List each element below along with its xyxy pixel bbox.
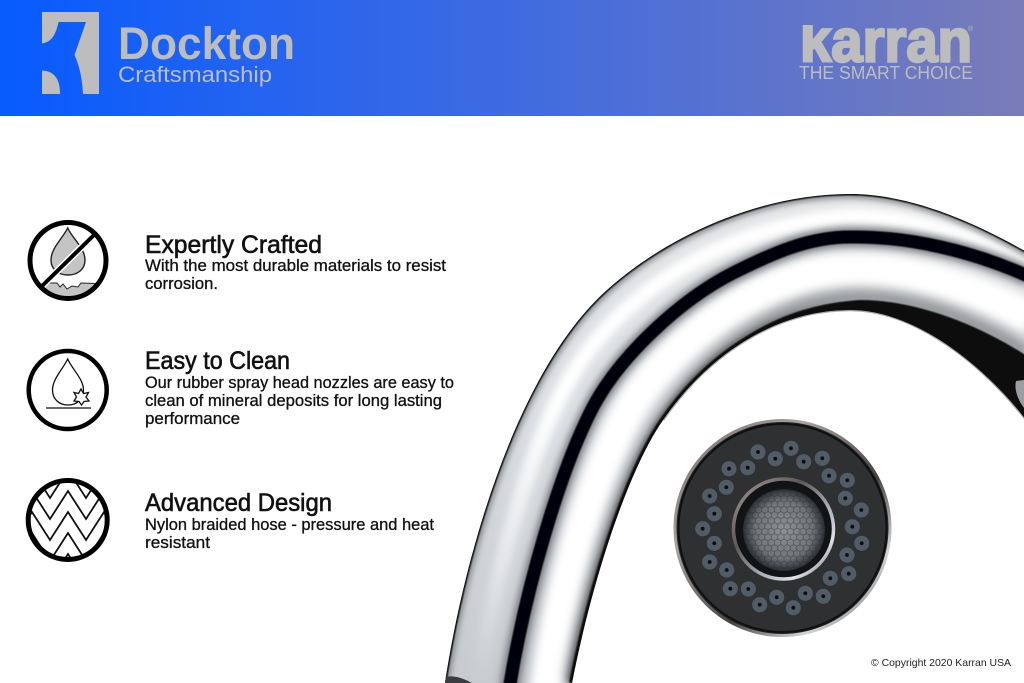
icon: braided hose <box>26 478 110 562</box>
heading and text: Easy to Clean: performance <box>145 410 240 428</box>
heading and text: Expertly Crafted <box>145 231 446 293</box>
heading and text: Expertly Crafted: With the most durable materials to resist <box>145 257 446 275</box>
heading and text: Easy to Clean <box>145 347 454 428</box>
heading and text: Expertly Crafted: Expertly Crafted <box>145 231 322 259</box>
heading and text: Easy to Clean: Our rubber spray head nozzles are easy to <box>145 374 454 392</box>
title: Dockton Craftsmanship: Dockton <box>118 18 295 69</box>
aerator ring <box>734 479 834 579</box>
spray head rim <box>675 420 890 636</box>
icon: easy clean drop <box>29 351 107 429</box>
Karran logo: ® <box>968 25 974 33</box>
heading and text: Easy to Clean: clean of mineral deposits for long lasting <box>145 392 442 410</box>
spray head <box>675 420 890 636</box>
copyright note: © Copyright 2020 Karran USA <box>871 657 1011 669</box>
rubber nozzles <box>694 440 870 616</box>
Karran logo: THE SMART CHOICE <box>799 63 973 83</box>
icon: Dockton logo mark <box>42 12 99 94</box>
chrome faucet spout <box>430 180 1024 683</box>
heading and text: Advanced Design: Advanced Design <box>145 489 332 517</box>
heading and text: Advanced Design: resistant <box>145 534 210 552</box>
aerator mesh <box>743 489 825 571</box>
title: Dockton Craftsmanship: Craftsmanship <box>118 62 272 87</box>
heading and text: Advanced Design: Nylon braided hose - pressure and heat <box>145 516 434 534</box>
heading and text: Easy to Clean: Easy to Clean <box>145 347 290 375</box>
heading and text: Expertly Crafted: corrosion. <box>145 275 218 293</box>
heading and text: Advanced Design <box>145 489 434 552</box>
header banner <box>0 0 1024 116</box>
icon: no corrosion drop <box>28 220 108 301</box>
Karran logo <box>799 25 973 79</box>
Karran logo: karran <box>800 8 972 74</box>
